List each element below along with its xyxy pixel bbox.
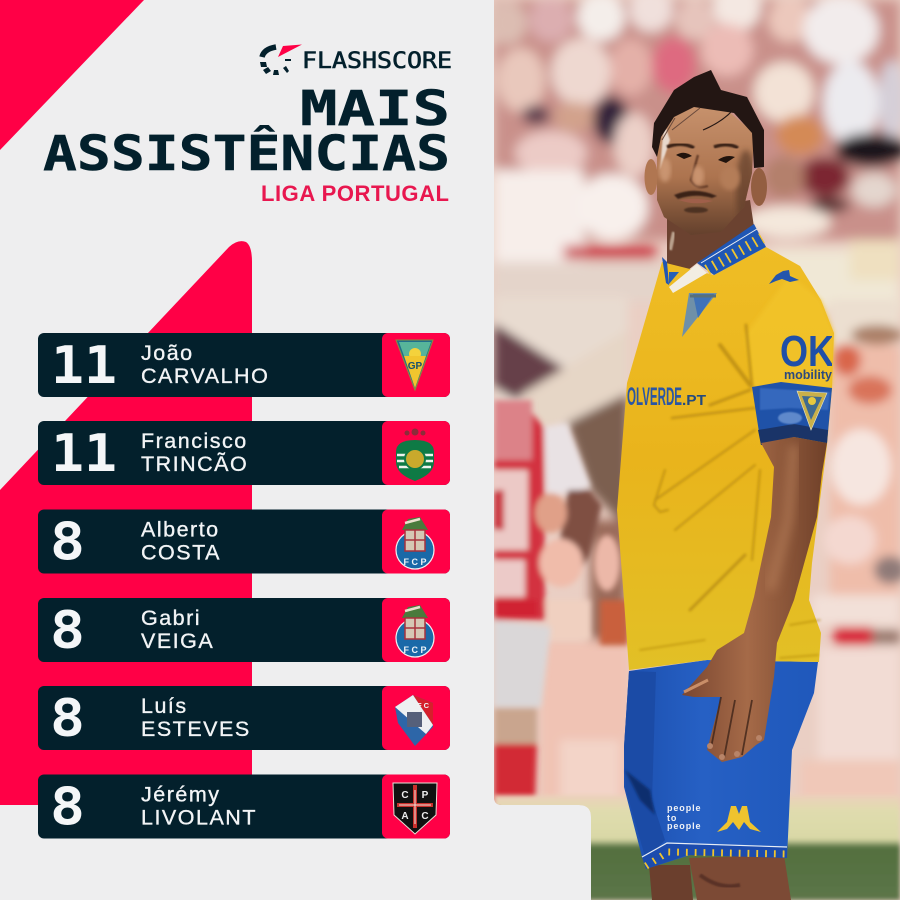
sponsor solverde: OLVERDE	[627, 383, 682, 411]
logo wordmark: FLASHSCORE	[302, 49, 452, 74]
row 4: Gabri	[141, 606, 201, 630]
face	[657, 107, 753, 224]
crest: Casa Pia	[393, 783, 437, 834]
crest: Estoril	[396, 340, 433, 390]
crest: Gil Vicente	[395, 695, 433, 746]
background player in red	[494, 400, 628, 805]
collar	[662, 224, 766, 293]
row 6: LIVOLANT	[141, 806, 257, 830]
ears	[644, 159, 658, 195]
shirt crest	[682, 293, 717, 337]
shirt folds	[640, 325, 820, 658]
neck	[667, 200, 754, 269]
row 1: CARVALHO	[141, 364, 269, 388]
ranking list	[38, 333, 450, 838]
crest: Porto	[396, 605, 434, 657]
hair	[652, 70, 764, 168]
row 2: 11	[51, 424, 117, 484]
yellow shirt	[617, 247, 834, 670]
row 2: TRINCÃO	[141, 451, 248, 476]
crest: Porto: F C P	[403, 645, 427, 655]
crest: Casa Pia: A	[401, 811, 409, 822]
sponsor mobility: mobility	[784, 368, 832, 382]
row 3: Alberto	[141, 518, 220, 542]
crest: Casa Pia: C	[421, 811, 429, 822]
row 3: 8	[50, 512, 85, 572]
blurred stadium crowd	[487, 0, 900, 310]
crest: Casa Pia: P	[422, 790, 429, 801]
red corner triangle	[0, 0, 144, 150]
row 5: ESTEVES	[141, 717, 251, 741]
row 2	[38, 421, 450, 485]
crest: Casa Pia: C	[401, 790, 409, 801]
row 3: COSTA	[141, 540, 221, 564]
sponsor solverde: .PT	[682, 392, 706, 409]
subtitle: LIGA PORTUGAL	[261, 181, 449, 206]
sponsor solverde	[627, 387, 706, 405]
grass	[494, 795, 900, 900]
Flashscore logo	[260, 44, 452, 75]
row 1	[38, 333, 450, 397]
row 6: Jérémy	[141, 782, 220, 806]
row 5: 8	[50, 689, 85, 749]
arm band	[752, 382, 832, 445]
row 1: João	[141, 341, 194, 365]
row 3	[38, 510, 450, 574]
blue shorts	[624, 660, 818, 869]
row 5	[38, 686, 450, 750]
large red background shape	[0, 241, 252, 805]
sponsor OK: OK	[780, 327, 834, 376]
row 2: Francisco	[141, 429, 248, 453]
arm and hand	[682, 437, 827, 762]
row 6	[38, 774, 450, 838]
title: ASSISTÊNCIAS	[43, 125, 450, 182]
crest: Porto	[396, 517, 434, 569]
row 5: Luís	[141, 694, 188, 718]
crest: Estoril: GP	[408, 361, 423, 372]
row 1: 11	[51, 336, 117, 396]
shorts text: people	[667, 803, 701, 813]
legs	[649, 865, 693, 900]
sleeve highlight	[750, 292, 838, 390]
row 4	[38, 598, 450, 662]
crest: Porto: F C P	[403, 557, 427, 567]
title: MAIS	[300, 81, 450, 137]
player figure	[617, 70, 834, 900]
blurred background structure	[494, 296, 900, 810]
blue shorts: people	[667, 821, 701, 831]
logo mark	[260, 44, 302, 75]
crest: Gil Vicente: F C	[417, 701, 430, 710]
row 4: 8	[50, 601, 85, 661]
crest: Sporting	[396, 428, 434, 481]
kappa shoulder logo	[769, 270, 799, 284]
title	[43, 81, 450, 182]
row 4: VEIGA	[141, 629, 214, 653]
kappa shorts logo	[717, 806, 761, 832]
hem	[642, 843, 787, 869]
row 6: 8	[50, 778, 85, 838]
blue shorts: to	[667, 813, 677, 823]
player photo	[487, 0, 900, 900]
